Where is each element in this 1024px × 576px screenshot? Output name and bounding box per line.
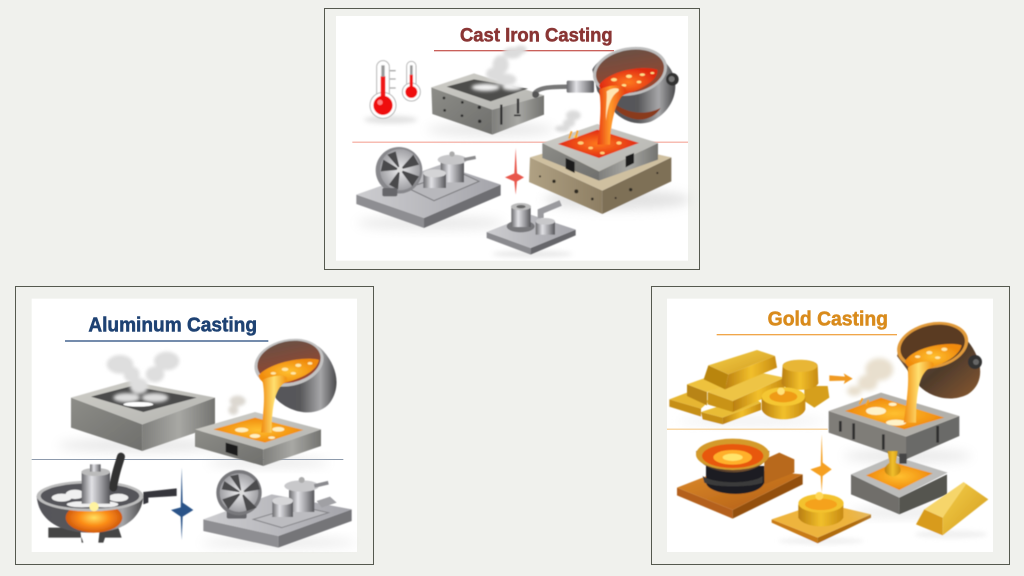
gray mold with molten gold [829, 358, 971, 463]
small mold with molten aluminum [195, 376, 328, 467]
fan machine [356, 147, 504, 230]
title underline [65, 340, 268, 342]
ladle pouring molten iron [532, 41, 679, 123]
smoking iron mold [427, 45, 554, 136]
icon: thermometers [364, 61, 420, 124]
arrow: star [171, 468, 193, 540]
panel: cast iron casting [324, 8, 699, 269]
fan machine [202, 470, 355, 548]
divider line [32, 459, 343, 460]
ladle pouring molten gold [893, 316, 982, 398]
arrow: star [810, 434, 832, 493]
gold coin on plate [772, 492, 871, 544]
divider line [667, 428, 828, 431]
gold bar [914, 482, 988, 538]
arrow: right [829, 373, 853, 384]
ladle pouring molten aluminum [250, 333, 337, 412]
panel: gold casting [652, 286, 1009, 564]
arrow: star [505, 148, 524, 195]
heading: gold casting: Gold Casting [768, 308, 888, 330]
title underline [717, 334, 897, 335]
furnace mold with molten iron [529, 85, 691, 214]
gold bar stack [669, 350, 829, 426]
small gray mold with jug [851, 451, 951, 517]
divider line [352, 142, 688, 143]
panel: aluminum casting [15, 286, 373, 564]
heading: cast iron casting: Cast Iron Casting [460, 24, 613, 46]
boiling pan on stove [37, 457, 177, 543]
title underline [434, 50, 614, 51]
heading: aluminum casting: Aluminum Casting [88, 315, 257, 337]
big aluminum mold with vapour [58, 352, 225, 452]
small valve machine [487, 203, 576, 257]
crucible on copper base [677, 439, 803, 519]
